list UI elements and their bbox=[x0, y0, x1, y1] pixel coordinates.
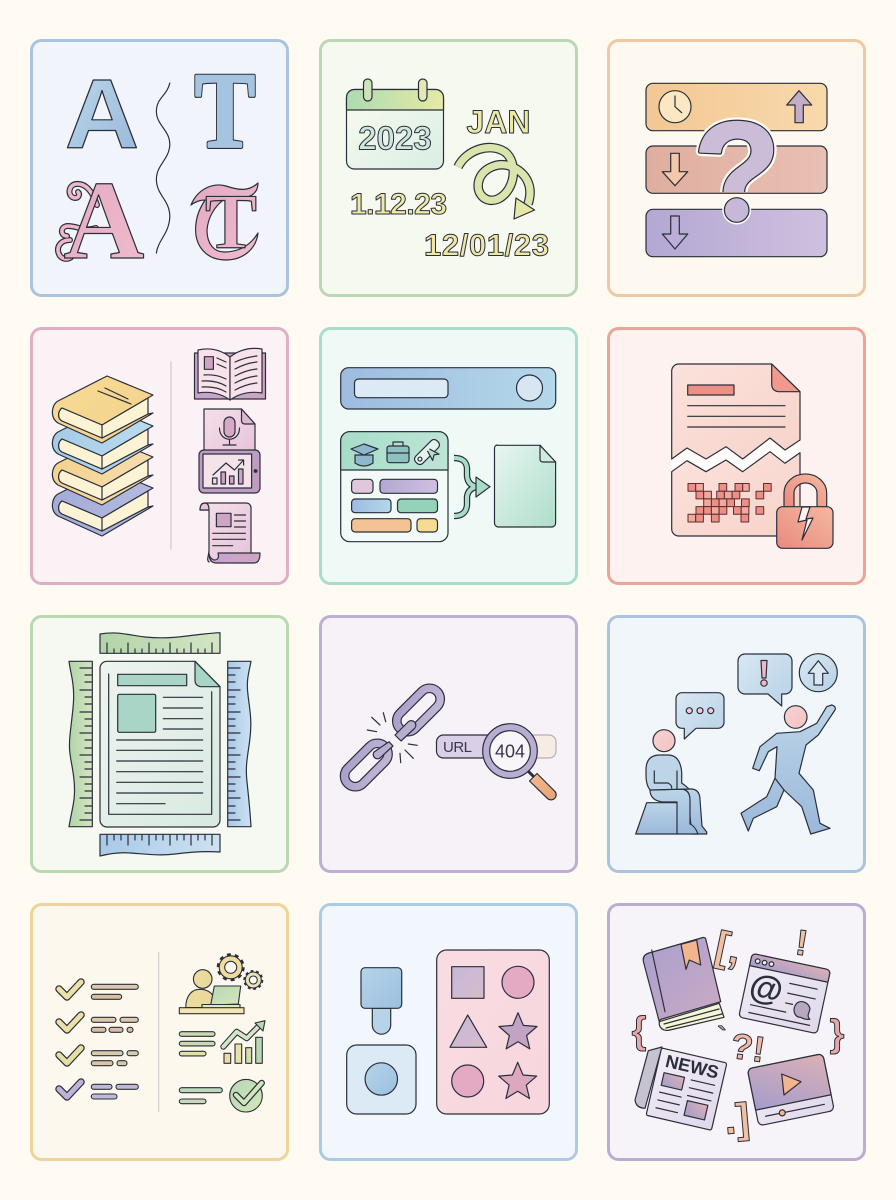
circle slot lower bbox=[452, 1065, 484, 1097]
broken upper stub bbox=[395, 721, 416, 741]
icon: audio document bbox=[204, 409, 255, 455]
URL pill: URL bbox=[443, 739, 472, 756]
icon: scroll bbox=[200, 503, 260, 563]
punctuation: bracket and comma: [, bbox=[711, 922, 746, 973]
divider bbox=[170, 362, 172, 549]
question mark: ? bbox=[694, 93, 780, 252]
punctuation: backtick: ` bbox=[717, 1021, 727, 1052]
panel: shape matching bbox=[320, 904, 576, 1160]
icon: newspaper bbox=[635, 1047, 727, 1130]
break sparks bbox=[367, 713, 417, 763]
slab serif letter T: T bbox=[195, 51, 255, 171]
punctuation: question exclamation: ?! bbox=[728, 1025, 768, 1070]
panel: page margins and rulers bbox=[32, 616, 288, 872]
bar: orange bbox=[646, 83, 827, 131]
checklist item 2 bbox=[59, 1015, 138, 1032]
search bar bbox=[341, 368, 556, 409]
icon: briefcase bbox=[387, 442, 409, 463]
shape board bbox=[437, 950, 549, 1114]
ruler: bottom bbox=[100, 834, 220, 856]
icon: tablet chart bbox=[199, 450, 260, 493]
icon: stack of books bbox=[52, 376, 153, 536]
bar: purple bbox=[646, 209, 827, 257]
URL pill bbox=[436, 735, 556, 758]
gothic letter T: T bbox=[205, 178, 257, 265]
icon: down arrow rose bbox=[662, 153, 688, 186]
icon: open book bbox=[194, 348, 266, 400]
square peg bbox=[361, 968, 402, 1034]
icon: lower chain link bbox=[334, 733, 398, 797]
icon: browser page bbox=[739, 953, 830, 1034]
ruler: top bbox=[100, 633, 220, 653]
text lines with growth chart bbox=[179, 1021, 265, 1063]
broken lower stub bbox=[373, 742, 393, 759]
panel: stacked sources bbox=[32, 328, 288, 584]
icon: magnifier with 404 bbox=[483, 724, 556, 800]
label 12/01/23: 12/01/23 bbox=[424, 228, 549, 262]
punctuation: period and bracket: .] bbox=[722, 1094, 752, 1143]
punctuation: exclamation: ! bbox=[793, 921, 811, 964]
punctuation: left brace: { bbox=[632, 1010, 646, 1052]
panel: uncertain ordering bbox=[608, 40, 864, 296]
divider bbox=[158, 952, 160, 1112]
panel: mixed media citations bbox=[608, 904, 864, 1160]
torn document top bbox=[672, 364, 800, 459]
merge brace arrow bbox=[454, 458, 490, 516]
sitting figure bbox=[636, 730, 707, 834]
icon: video player bbox=[747, 1054, 834, 1126]
icon: broken padlock bbox=[777, 474, 833, 548]
ruler: left bbox=[69, 661, 92, 827]
form chips bbox=[352, 479, 438, 532]
torn document bottom bbox=[672, 452, 800, 536]
panel: corrupted file bbox=[608, 328, 864, 584]
icon: browser page: @ bbox=[746, 967, 786, 1011]
square slot bbox=[452, 967, 484, 998]
triangle slot bbox=[450, 1015, 487, 1047]
curly arrow bbox=[458, 148, 535, 219]
corrupted pixel glitch bbox=[688, 484, 771, 522]
speech bubble dots bbox=[676, 693, 724, 739]
panel: checklist and outcomes bbox=[32, 904, 288, 1160]
icon: calendar 2023 bbox=[346, 79, 444, 169]
question mark bbox=[696, 117, 777, 224]
icon: newspaper: NEWS bbox=[664, 1051, 721, 1083]
checklist item 1 bbox=[59, 982, 138, 999]
checklist item 3 bbox=[59, 1048, 138, 1066]
icon: diploma bbox=[413, 438, 445, 470]
icon: graduation cap bbox=[351, 444, 378, 466]
panel: date formats bbox=[320, 40, 576, 296]
panel: passive vs active bbox=[608, 616, 864, 872]
bar: rose bbox=[646, 146, 827, 193]
label JAN: JAN bbox=[466, 104, 531, 140]
circle slot bbox=[502, 966, 534, 998]
panel: broken link 404 bbox=[320, 616, 576, 872]
document page bbox=[100, 661, 220, 827]
ruler: right bbox=[228, 661, 251, 827]
question mark: ? bbox=[694, 93, 780, 252]
panel: forms to file bbox=[320, 328, 576, 584]
round hole block bbox=[347, 1045, 416, 1114]
star slot lower bbox=[499, 1062, 537, 1098]
icon: calendar 2023: 2023 bbox=[358, 120, 432, 156]
icon: person at laptop with gears bbox=[179, 956, 261, 1014]
tear gap bbox=[672, 438, 800, 472]
panel: typography contrast bbox=[32, 40, 288, 296]
form card bbox=[341, 432, 448, 542]
star slot bbox=[499, 1013, 537, 1049]
icon: upper chain link bbox=[386, 678, 451, 742]
sans serif letter A: A bbox=[65, 60, 139, 169]
icon: up arrow circle bbox=[799, 654, 837, 692]
speech bubble exclamation bbox=[738, 654, 792, 706]
label 1.12.23: 1.12.23 bbox=[350, 188, 447, 221]
punctuation: right brace: } bbox=[830, 1013, 845, 1055]
icon: down arrow purple bbox=[662, 216, 688, 249]
icon: magnifier with 404: 404 bbox=[495, 742, 525, 762]
checklist item 4 bbox=[59, 1082, 138, 1099]
wavy divider bbox=[156, 83, 170, 253]
text lines with approval check bbox=[179, 1079, 262, 1112]
icon: bookmarked book bbox=[643, 937, 724, 1030]
question mark: ? bbox=[694, 93, 780, 252]
icon: play triangle bbox=[782, 1074, 801, 1095]
icon: up arrow bbox=[787, 91, 812, 123]
icon: clock bbox=[659, 91, 691, 123]
running figure bbox=[741, 705, 835, 834]
icon: output document bbox=[494, 445, 556, 527]
ornate letter A: A bbox=[64, 159, 145, 283]
slab serif letter T: T bbox=[195, 51, 255, 171]
